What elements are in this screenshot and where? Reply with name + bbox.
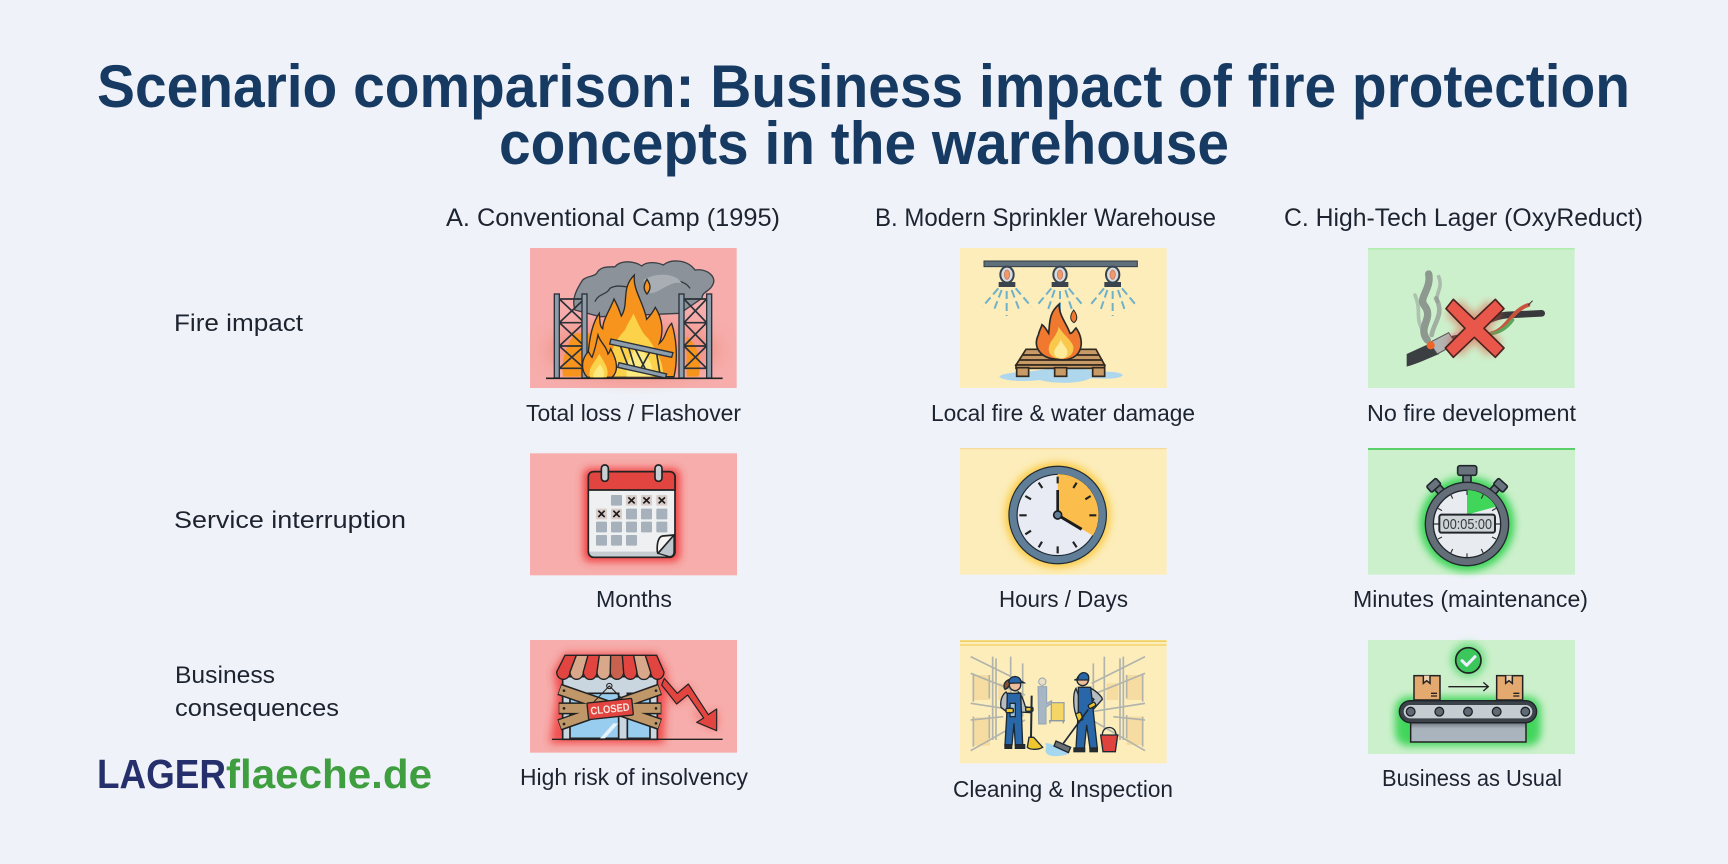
collapsed beam <box>610 339 673 378</box>
pallet <box>1016 349 1105 376</box>
check badge <box>1456 648 1481 673</box>
caption: local fire: Local fire & water damage <box>931 400 1195 426</box>
clock hands <box>1054 490 1082 529</box>
row label: service interruption: Service interruption <box>174 507 406 534</box>
calendar rings <box>601 465 662 481</box>
puddle <box>1045 743 1070 756</box>
clock ticks <box>1019 477 1096 553</box>
caption: insolvency: High risk of insolvency <box>520 764 748 790</box>
caption: months: Months <box>596 586 672 612</box>
panel: C business consequences, conveyor <box>1368 640 1575 754</box>
worker left <box>1001 677 1033 748</box>
background person <box>1038 678 1052 724</box>
row label: business consequences: consequences <box>175 695 339 722</box>
column headers: C. High-Tech Lager (OxyReduct) <box>1284 204 1643 232</box>
panel: A business consequences, closed shop <box>530 640 737 753</box>
column headers <box>446 204 1643 232</box>
column headers: B. Modern Sprinkler Warehouse <box>875 204 1216 232</box>
title: concepts in the warehouse <box>499 110 1229 177</box>
red cross glow <box>1453 307 1495 349</box>
stopwatch display: 00:05:00 <box>1443 516 1492 533</box>
logo <box>97 751 432 797</box>
warehouse shelves <box>971 657 1145 751</box>
conveyor base <box>1411 723 1526 742</box>
right rack <box>679 294 712 378</box>
awning <box>557 655 664 680</box>
shelf boxes <box>973 675 1143 746</box>
panel: B fire impact, sprinkler over pallet <box>960 248 1167 388</box>
red bucket <box>1101 727 1118 752</box>
flame <box>1036 304 1081 360</box>
smoke wisps <box>1415 274 1440 340</box>
left fire <box>562 333 590 377</box>
conveyor belt <box>1399 701 1537 723</box>
cart <box>1049 703 1065 723</box>
row label: fire impact: Fire impact <box>174 310 303 337</box>
left box <box>1414 676 1440 700</box>
burnt cable <box>1407 343 1439 367</box>
panel: B business consequences, cleaning crew <box>960 640 1167 763</box>
green elapsed sector <box>1467 490 1496 524</box>
caption: hours days: Hours / Days <box>999 586 1128 612</box>
stopwatch crown <box>1426 466 1508 495</box>
crossed-out days <box>598 497 665 517</box>
title: Scenario comparison: Business impact of fire protection <box>97 53 1630 120</box>
wooden boards <box>559 689 661 725</box>
caption: total loss: Total loss / Flashover <box>526 400 741 426</box>
main flame <box>587 275 676 377</box>
small flame <box>583 335 617 377</box>
panel: A service interruption, calendar <box>530 453 737 575</box>
row label: business consequences: Business <box>175 662 275 689</box>
sprinkler pipe <box>984 261 1137 267</box>
shop building <box>563 677 657 739</box>
right box <box>1497 676 1523 700</box>
board nails <box>563 689 657 725</box>
row label: business consequences <box>175 662 339 722</box>
panel: A fire impact, warehouse fire <box>530 248 737 388</box>
left rack <box>554 294 587 378</box>
wires <box>1447 301 1542 338</box>
panel: B service interruption, clock <box>960 448 1167 575</box>
floor mop <box>1054 709 1088 753</box>
falling arrow <box>662 678 717 731</box>
title <box>97 53 1630 177</box>
elapsed sector <box>1058 474 1099 536</box>
panel: C service interruption, stopwatch <box>1368 448 1575 575</box>
logo: flaeche.de <box>226 751 432 797</box>
logo: LAGER <box>97 751 226 797</box>
caption: no fire: No fire development <box>1367 400 1577 426</box>
transfer arrow <box>1448 682 1488 691</box>
sprinkler heads <box>1000 267 1120 286</box>
broom <box>1027 696 1043 749</box>
column headers: A. Conventional Camp (1995) <box>446 204 780 232</box>
hanging sign: CLOSED <box>590 702 630 718</box>
puddle <box>999 368 1123 383</box>
calendar cells <box>596 495 667 546</box>
caption: business as usual: Business as Usual <box>1382 765 1562 791</box>
worker right <box>1074 673 1102 752</box>
caption: minutes: Minutes (maintenance) <box>1353 586 1588 612</box>
caption: cleaning: Cleaning & Inspection <box>953 776 1173 802</box>
water spray <box>983 288 1137 316</box>
red cross <box>1445 299 1504 357</box>
smoke cloud <box>574 261 714 317</box>
page curl <box>658 535 674 557</box>
stopwatch ticks <box>1434 490 1500 557</box>
panel: C fire impact, cable with red cross <box>1368 248 1575 388</box>
hanging sign <box>587 683 633 720</box>
